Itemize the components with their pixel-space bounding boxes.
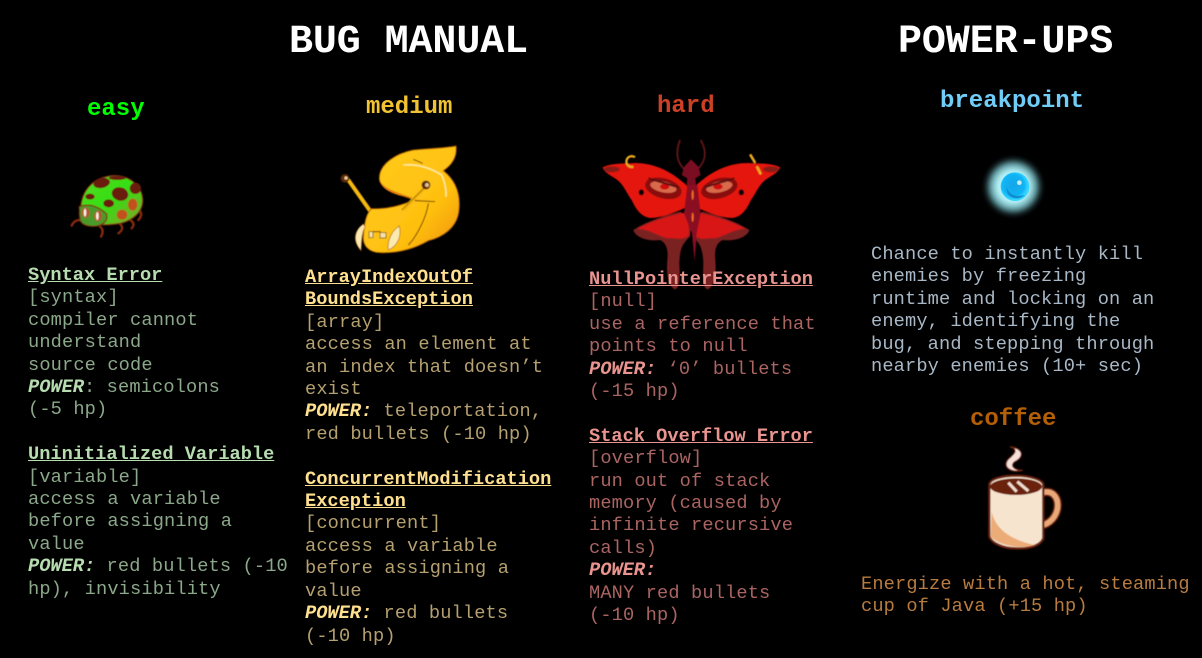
heading: medium: medium [366, 94, 452, 121]
text block: coffee description: Energize with a hot, steaming cup of Java (+15 hp) [861, 573, 1190, 617]
icon: green ladybug [72, 176, 143, 237]
text block: hard bugs: NullPointerException [null] use a reference that points to null POWER: ‘0’ bullets (-15 hp) Stack Overflow Error [overflow] run out of stack memory (caused by infinite recursive calls) POWER: MANY red bullets (-10 hp) [589, 268, 816, 626]
text block: easy bugs: Syntax Error [syntax] compiler cannot understand source code POWER: semicolons (-5 hp) Uninitialized Variable [variable] access a variable before assigning a value POWER: red bullets (-10 hp), invisibility [28, 264, 288, 600]
icon: coffee mug [989, 447, 1058, 548]
text block: breakpoint description: Chance to instantly kill enemies by freezing runtime and locking on an enemy, identifying the bug, and stepping through nearby enemies (10+ sec) [871, 243, 1154, 377]
title: power-ups: POWER-UPS [898, 20, 1113, 65]
heading: hard: hard [657, 93, 715, 120]
icon: breakpoint orb [982, 155, 1045, 218]
heading: coffee: coffee [970, 406, 1056, 433]
text block: medium bugs: ArrayIndexOutOf BoundsException [array] access an element at an index that doesn’t exist POWER: teleportation, red bullets (-10 hp) ConcurrentModification Exception [concurrent] access a variable before assigning a value POWER: red bullets (-10 hp) [305, 266, 551, 646]
heading: breakpoint: breakpoint [940, 88, 1084, 115]
icon: yellow slug [341, 146, 459, 253]
heading: easy: easy [87, 96, 145, 123]
title: bug manual: BUG MANUAL [289, 20, 528, 65]
icon: red butterfly [603, 140, 780, 289]
